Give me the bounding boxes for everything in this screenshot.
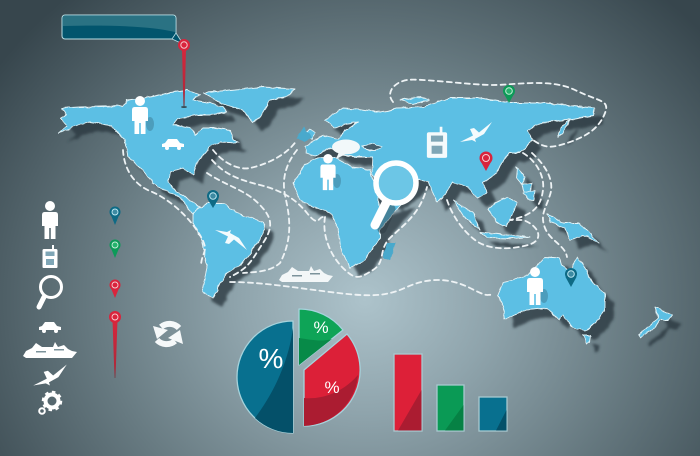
pin: blue south america [207,190,219,208]
pin: red long callout [178,39,190,108]
plane asia [460,122,492,142]
speech bubble [332,140,360,159]
pie chart [237,309,360,433]
bar chart [394,354,507,431]
pie slice: green [299,309,343,365]
icon: person [42,201,58,239]
percent label red: % [324,378,340,397]
legend pin: blue [110,206,120,225]
bar red [394,354,422,431]
icon: ship [23,342,77,358]
pie slice: blue [237,321,293,433]
legend icons column [23,201,77,414]
plane south america [215,230,247,250]
legend pin: long red [109,311,121,378]
percent label blue: % [259,343,283,374]
pin: blue australia [565,268,577,287]
Iceland [297,127,312,142]
pie slice: red [304,334,360,426]
dashed shipping routes [123,80,606,295]
map shadow [68,96,681,353]
person africa [320,154,341,190]
car north america [162,139,184,150]
person australia [527,267,548,305]
legend pin: red [110,280,120,298]
world map [59,87,672,344]
Black Sea [362,144,382,150]
icon: gears [39,392,61,414]
bar blue [479,397,507,431]
ship on ocean [279,266,333,282]
icon: phone [42,245,58,268]
Madagascar [383,243,395,260]
pin: green russia [503,85,515,103]
magnifier on map [375,163,416,229]
callout box [62,15,183,44]
icon: refresh arrows [153,324,183,344]
percent label green: % [313,318,329,337]
pin: red china [480,152,492,171]
icon: car [39,322,61,333]
person north america [132,96,154,134]
icon: plane [33,364,67,386]
phone asia [427,127,447,158]
legend pin: green [110,240,120,258]
bar green [437,385,464,431]
icon: magnifier [39,276,62,307]
